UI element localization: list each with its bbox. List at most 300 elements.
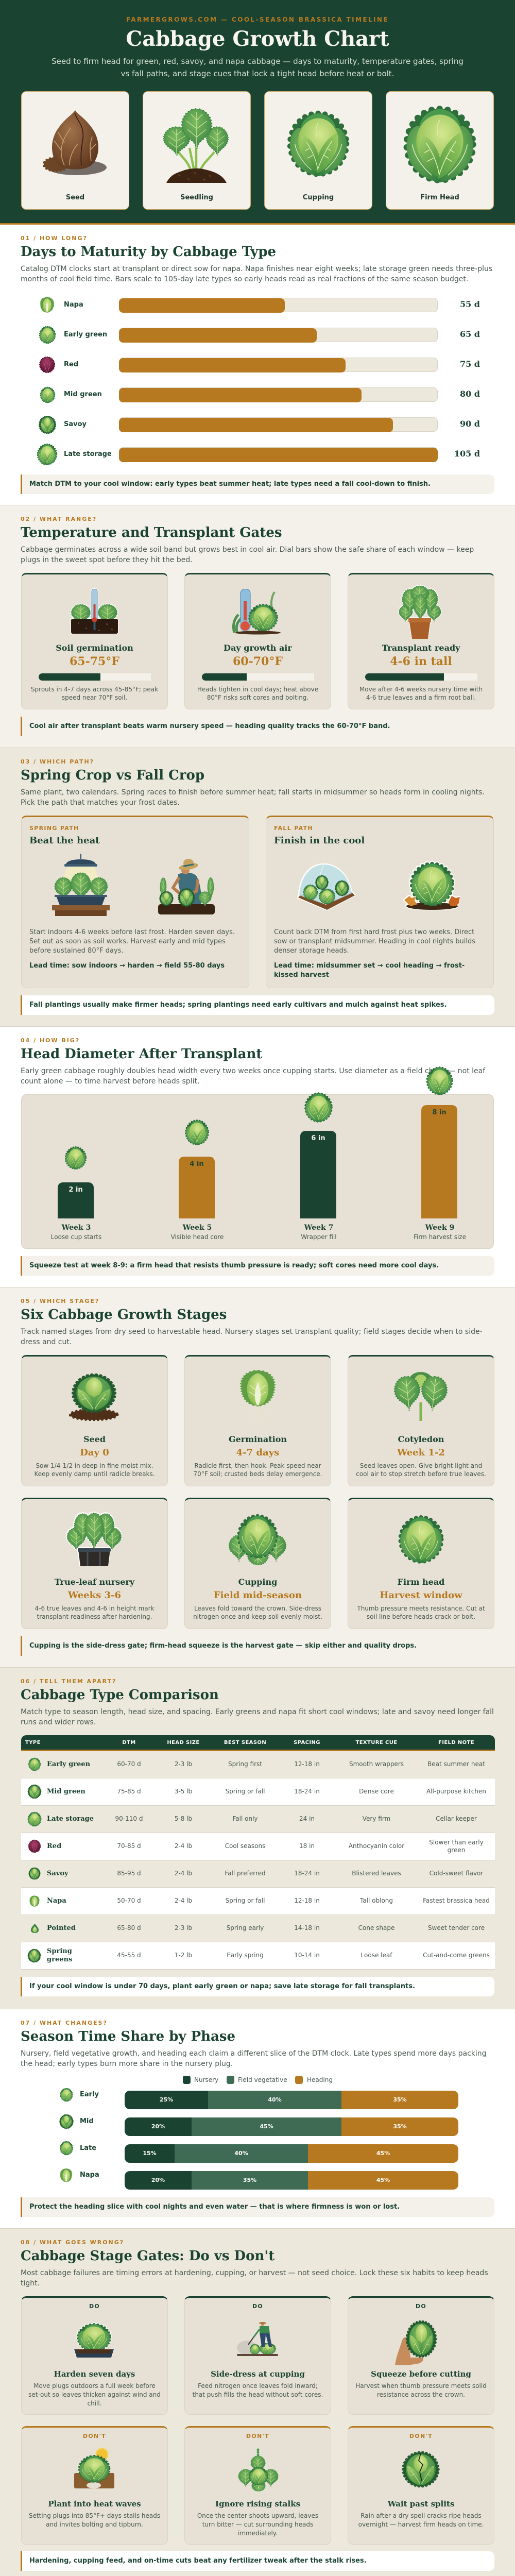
row: late storage: 24 in bbox=[299, 1815, 315, 1822]
note: Visible head core bbox=[171, 1233, 224, 1241]
card: soil germination bbox=[21, 573, 168, 709]
description: sow or transplant midsummer. Heading in cool nights builds bbox=[274, 938, 475, 945]
description: Count back DTM from first hard frost plus two weeks. Direct bbox=[274, 928, 474, 936]
lead time: Lead time: sow indoors → harden → field 55-80 days bbox=[29, 962, 225, 970]
description: denser storage heads. bbox=[274, 947, 349, 955]
note bbox=[197, 686, 318, 701]
bar bbox=[119, 387, 438, 402]
icon: firm head bbox=[393, 1514, 449, 1565]
section 5: growth stages bbox=[0, 1287, 515, 1667]
callout: If your cool window is under 70 days, plant early green or napa; save late storage for fall transplants. bbox=[29, 1982, 415, 1990]
panel: fall path bbox=[266, 816, 494, 988]
note: Harvest when thumb pressure meets solid bbox=[355, 2382, 487, 2389]
row: early green: Early green bbox=[47, 1760, 90, 1768]
section intro: tight. bbox=[21, 2279, 40, 2287]
week: Week 9 bbox=[425, 1224, 454, 1232]
card: true-leaf nursery bbox=[21, 1498, 168, 1629]
icon: seed bbox=[69, 1372, 119, 1421]
icon: late bbox=[59, 2141, 74, 2156]
row: napa bbox=[40, 297, 480, 313]
note: soil line before heads crack or bolt. bbox=[367, 1613, 475, 1620]
name: Ignore rising stalks bbox=[215, 2499, 300, 2509]
callout bbox=[21, 717, 494, 736]
section intro: dress and cut. bbox=[21, 1338, 72, 1346]
icon: cupping bbox=[228, 1513, 287, 1566]
note: nitrogen once and keep soil evenly moist. bbox=[193, 1613, 322, 1620]
legend: heading: Heading bbox=[307, 2076, 333, 2083]
week: Week 5 bbox=[183, 1224, 212, 1232]
bar chart panel: head diameter bbox=[21, 1094, 494, 1249]
row: pointed: 2-3 lb bbox=[175, 1924, 192, 1931]
row: spring greens bbox=[21, 1942, 495, 1970]
note: Thumb pressure meets resistance. Cut at bbox=[357, 1605, 485, 1612]
row: mid green: 75-85 d bbox=[117, 1788, 141, 1795]
icon: mid green bbox=[40, 386, 56, 403]
section label: 01 / HOW LONG? bbox=[21, 235, 88, 242]
section intro: Early green cabbage roughly doubles head width every two weeks once cupping starts. Use diameter as a field check — not leaf bbox=[21, 1067, 485, 1075]
stacked bar: 20% bbox=[151, 2123, 165, 2130]
tag: FALL PATH bbox=[274, 825, 313, 832]
stage card: seedling bbox=[143, 91, 251, 210]
stacked bar: 45% bbox=[376, 2177, 390, 2183]
card: cupping bbox=[184, 1498, 331, 1629]
note: Radicle first, then hook. Peak speed near bbox=[194, 1462, 321, 1469]
dial bar bbox=[39, 673, 151, 681]
row: early green: 60-70 d bbox=[117, 1760, 141, 1768]
note bbox=[348, 2381, 494, 2399]
bar bbox=[119, 417, 438, 432]
name: Day growth air bbox=[224, 643, 292, 653]
description: Set out as soon as soil works. Harvest early and mid types bbox=[29, 938, 226, 945]
stacked bar: 20% bbox=[151, 2177, 165, 2183]
row: napa: 2-4 lb bbox=[175, 1897, 192, 1904]
icon: cupping cabbage bbox=[287, 110, 349, 177]
row: pointed: 14-18 in bbox=[294, 1924, 320, 1931]
note: Move after 4-6 weeks nursery time with bbox=[359, 686, 483, 693]
stage card: firm head bbox=[386, 91, 494, 210]
note: Rain after a dry spell cracks ripe heads bbox=[360, 2512, 482, 2519]
row: red: green bbox=[448, 1846, 465, 1854]
card: day growth air bbox=[184, 573, 331, 709]
row: spring greens: 10-14 in bbox=[294, 1952, 320, 1959]
subtitle: Seed to firm head for green, red, savoy, and napa cabbage — days to maturity, temperature gates, spring bbox=[52, 57, 464, 66]
icon: cabbage in tray bbox=[73, 2323, 115, 2359]
section heading: Season Time Share by Phase bbox=[21, 2029, 235, 2044]
legend: field vegetative: Field vegetative bbox=[238, 2076, 287, 2083]
timing: Weeks 3-6 bbox=[68, 1590, 121, 1601]
name: Germination bbox=[229, 1434, 287, 1444]
section intro bbox=[21, 1707, 494, 1727]
row: savoy: 2-4 lb bbox=[175, 1870, 192, 1877]
label: Early bbox=[80, 2091, 99, 2098]
card: transplant ready bbox=[348, 573, 494, 709]
comparison table bbox=[21, 1735, 495, 1970]
label: Red bbox=[64, 361, 78, 368]
card: don't ignore stalks bbox=[184, 2426, 331, 2545]
description bbox=[29, 928, 235, 955]
row: pointed: 65-80 d bbox=[117, 1924, 141, 1931]
label: Firm Head bbox=[420, 194, 459, 201]
note: turn bitter — cut surrounding heads bbox=[202, 2520, 313, 2528]
legend: nursery bbox=[183, 2076, 214, 2084]
section label: 03 / WHICH PATH? bbox=[21, 758, 94, 765]
icon: cabbage bbox=[179, 1119, 215, 1146]
note: 4-6 true leaves and 4-6 in height mark bbox=[35, 1605, 154, 1612]
week: Week 7 bbox=[304, 1224, 333, 1232]
table header: BEST SEASON bbox=[224, 1739, 266, 1745]
section intro: Nursery, field vegetative growth, and heading each claim a different slice of the DTM clock. Late types spend more days packing bbox=[21, 2049, 487, 2058]
icon: farmer tending plants bbox=[158, 859, 215, 914]
row: savoy: Savoy bbox=[47, 1870, 68, 1877]
bar: 8 in bbox=[421, 1105, 457, 1218]
bar bbox=[119, 298, 438, 312]
row: red: 70-85 d bbox=[117, 1842, 141, 1850]
section intro: months of cool field time. Bars scale to 105-day late types so early heads read as real fractions of the same season budget. bbox=[21, 275, 468, 283]
callout: Fall plantings usually make firmer heads; spring plantings need early cultivars and mulch against heat spikes. bbox=[29, 1001, 447, 1009]
note: transplant readiness after hardening. bbox=[37, 1613, 152, 1620]
row: napa bbox=[21, 1888, 495, 1915]
card: cotyledon bbox=[348, 1355, 494, 1486]
note bbox=[359, 686, 483, 701]
section heading: Cabbage Stage Gates: Do vs Don't bbox=[21, 2248, 274, 2264]
tag: DO bbox=[252, 2303, 263, 2310]
row: spring greens: 1-2 lb bbox=[175, 1952, 192, 1959]
section intro: Cabbage germinates across a wide soil band but grows best in cool air. Dial bars show the safe share of each window — keep bbox=[21, 546, 474, 554]
icon: cabbage bbox=[65, 1146, 87, 1170]
stacked bar: 25% bbox=[160, 2096, 173, 2103]
bar: 4 in bbox=[179, 1157, 215, 1218]
icon: cabbage in heat bbox=[73, 2447, 115, 2489]
note bbox=[31, 686, 158, 701]
row: red bbox=[39, 357, 480, 373]
value: 65 d bbox=[460, 329, 480, 339]
stacked bar: 40% bbox=[268, 2096, 282, 2103]
row: savoy: Fall preferred bbox=[225, 1870, 266, 1877]
note: that push fills the head without soft cores. bbox=[193, 2391, 323, 2398]
note bbox=[348, 1462, 494, 1478]
section intro: Track named stages from dry seed to harvestable head. Nursery stages set transplant quality; field stages decide when to side- bbox=[21, 1328, 483, 1336]
callout: Protect the heading slice with cool nights and even water — that is where firmness is won or lost. bbox=[29, 2203, 400, 2211]
row: late bbox=[52, 2140, 464, 2163]
callout: Squeeze test at week 8-9: a firm head that resists thumb pressure is ready; soft cores need more cool days. bbox=[29, 1262, 439, 1269]
label: Cupping bbox=[303, 194, 334, 201]
value: 65-75°F bbox=[70, 655, 119, 668]
section label: 07 / WHAT CHANGES? bbox=[21, 2020, 108, 2026]
icon: mid bbox=[58, 2114, 75, 2129]
note: Setting plugs into 85°F+ days stalls heads bbox=[29, 2512, 160, 2519]
note: chill. bbox=[87, 2400, 102, 2407]
callout bbox=[21, 995, 494, 1015]
section label: 05 / WHICH STAGE? bbox=[21, 1298, 99, 1304]
row: red: 2-4 lb bbox=[175, 1842, 192, 1850]
name: Harden seven days bbox=[54, 2369, 135, 2379]
icon: potted transplant bbox=[398, 585, 442, 639]
timing: 4-7 days bbox=[236, 1447, 279, 1458]
stacked bar: 45% bbox=[376, 2150, 390, 2157]
name: Plant into heat waves bbox=[48, 2499, 141, 2509]
row: red bbox=[21, 1833, 495, 1860]
row: late storage bbox=[37, 443, 480, 465]
icon: farmer side-dressing bbox=[237, 2322, 278, 2356]
icon: seed bbox=[43, 110, 107, 175]
row: spring greens: greens bbox=[47, 1956, 72, 1963]
name: Side-dress at cupping bbox=[211, 2369, 305, 2379]
name: Seed bbox=[83, 1434, 106, 1444]
week 9 column bbox=[385, 1095, 494, 1248]
note: Once the center shoots upward, leaves bbox=[197, 2512, 318, 2519]
section intro: count alone — to time harvest before heads split. bbox=[21, 1077, 199, 1086]
section 6: type comparison bbox=[0, 1667, 515, 2009]
table header: HEAD SIZE bbox=[167, 1739, 200, 1745]
row: pointed: Sweet tender core bbox=[428, 1924, 485, 1931]
row: pointed: Pointed bbox=[47, 1924, 76, 1932]
section intro: Catalog DTM clocks start at transplant or direct sow for napa. Napa finishes near eight weeks; late storage green needs three-plus bbox=[21, 265, 492, 273]
row: red: Slower than early bbox=[429, 1838, 484, 1845]
lead time bbox=[274, 962, 465, 979]
note bbox=[185, 2381, 331, 2399]
bar: 2 in bbox=[58, 1182, 94, 1218]
name: Wait past splits bbox=[388, 2499, 454, 2509]
timing: Week 1-2 bbox=[397, 1447, 445, 1458]
note bbox=[22, 1462, 167, 1478]
row: red: Cool seasons bbox=[225, 1842, 265, 1850]
card: firm head bbox=[348, 1498, 494, 1629]
icon: germination bbox=[238, 1369, 278, 1425]
tag: DO bbox=[89, 2303, 100, 2310]
section heading: Spring Crop vs Fall Crop bbox=[21, 768, 204, 783]
row: late storage: Late storage bbox=[47, 1815, 94, 1823]
row: mid bbox=[52, 2113, 464, 2136]
callout bbox=[21, 1256, 494, 1276]
icon: early bbox=[59, 2088, 74, 2102]
row: napa: 12-18 in bbox=[294, 1897, 320, 1904]
name: Soil germination bbox=[56, 643, 133, 653]
section 2: temperature gates bbox=[0, 505, 515, 748]
dial bar bbox=[202, 673, 314, 681]
stacked bar bbox=[125, 2117, 458, 2136]
note: 4-6 true leaves and a firm root ball. bbox=[366, 694, 476, 701]
note: Heads tighten in cool days; heat above bbox=[197, 686, 318, 693]
icon: nursery plug bbox=[66, 1511, 123, 1566]
row: napa: 50-70 d bbox=[117, 1897, 141, 1904]
tag: DON'T bbox=[83, 2433, 106, 2439]
icon: bolting cabbage bbox=[237, 2446, 279, 2492]
callout: Hardening, cupping feed, and on-time cuts beat any fertilizer tweak after the stalk rises. bbox=[29, 2557, 367, 2565]
note: 70°F soil; crusted beds delay emergence. bbox=[194, 1470, 322, 1478]
name: Transplant ready bbox=[382, 643, 460, 653]
icon: cabbage bbox=[301, 1092, 336, 1123]
note bbox=[185, 2511, 331, 2538]
row: early green: 2-3 lb bbox=[175, 1760, 192, 1768]
icon: savoy bbox=[39, 415, 56, 434]
name: True-leaf nursery bbox=[55, 1577, 134, 1587]
name: Squeeze before cutting bbox=[371, 2369, 471, 2379]
bar: 4 in: 4 in bbox=[190, 1160, 204, 1168]
row: early green: Spring first bbox=[228, 1760, 262, 1768]
row: savoy: 85-95 d bbox=[117, 1870, 141, 1877]
legend: field vegetative bbox=[227, 2076, 294, 2084]
note: overnight — harvest firm heads on time. bbox=[358, 2520, 484, 2528]
section 1: days to maturity bbox=[0, 225, 515, 505]
stacked bar: 35% bbox=[393, 2096, 407, 2103]
section 4: head diameter bbox=[0, 1026, 515, 1287]
table header: SPACING bbox=[294, 1739, 320, 1745]
bar: 8 in: 8 in bbox=[432, 1109, 447, 1116]
label: Napa bbox=[64, 301, 83, 309]
icon: seedling bbox=[163, 108, 229, 183]
week: Week 3 bbox=[62, 1224, 91, 1232]
row: red: 18 in bbox=[299, 1842, 315, 1850]
stacked bar chart bbox=[0, 2087, 515, 2190]
icon: grow light tray bbox=[52, 854, 110, 916]
week 5 column bbox=[143, 1095, 252, 1248]
label: Mid green bbox=[64, 391, 102, 398]
callout bbox=[21, 1977, 494, 1996]
section intro: Match type to season length, head size, and spacing. Early greens and napa fit short cool windows; late and savoy need longer fall bbox=[21, 1708, 494, 1716]
path title: Finish in the cool bbox=[274, 835, 365, 846]
stacked bar: 35% bbox=[243, 2177, 256, 2183]
stage card: seed bbox=[21, 91, 129, 210]
bar: 6 in bbox=[300, 1131, 336, 1218]
row: late storage: Very firm bbox=[363, 1815, 390, 1822]
icon: napa bbox=[59, 2166, 73, 2184]
row: red: Red bbox=[47, 1842, 61, 1850]
row: red: Anthocyanin color bbox=[349, 1842, 404, 1850]
eyebrow: FARMERGROWS.COM — COOL-SEASON BRASSICA TIMELINE bbox=[126, 16, 389, 23]
row: mid green: Mid green bbox=[47, 1788, 85, 1795]
icon: early green bbox=[39, 326, 56, 344]
value: 80 d bbox=[460, 389, 480, 399]
icon: hand squeezing head bbox=[395, 2319, 439, 2365]
label: Savoy bbox=[64, 420, 87, 428]
section intro bbox=[21, 1327, 483, 1347]
description: Start indoors 4-6 weeks before last frost. Harden seven days. bbox=[29, 928, 235, 936]
row: mid green: Spring or fall bbox=[226, 1788, 265, 1795]
row: late storage bbox=[21, 1806, 495, 1833]
timing: Field mid-season bbox=[214, 1590, 302, 1601]
row: napa: Napa bbox=[47, 1897, 66, 1905]
name: Cupping bbox=[238, 1577, 277, 1587]
stacked bar bbox=[125, 2171, 458, 2190]
card: don't plant into heat bbox=[21, 2426, 168, 2545]
title: Cabbage Growth Chart bbox=[126, 27, 389, 51]
label: Seed bbox=[66, 194, 84, 201]
value: 105 d bbox=[454, 449, 480, 459]
legend: heading bbox=[295, 2076, 334, 2084]
icon: split head bbox=[400, 2450, 441, 2488]
note: Feed nitrogen once leaves fold inward; bbox=[198, 2382, 318, 2389]
row: late storage: Cellar keeper bbox=[436, 1815, 477, 1822]
timing: Day 0 bbox=[80, 1447, 109, 1458]
timing: Harvest window bbox=[380, 1590, 462, 1601]
row: napa: Fastest brassica head bbox=[423, 1897, 490, 1904]
note: Keep evenly damp until radicle breaks. bbox=[34, 1470, 155, 1478]
callout bbox=[21, 2551, 494, 2571]
icon: cotyledon bbox=[393, 1371, 449, 1421]
section heading: Temperature and Transplant Gates bbox=[21, 525, 282, 540]
week 3 column bbox=[51, 1146, 101, 1241]
row: mid green bbox=[21, 1778, 495, 1806]
bar bbox=[119, 447, 438, 462]
section intro: plugs in the sweet spot before they hit the bed. bbox=[21, 556, 193, 564]
note: 80°F risks soft cores and bolting. bbox=[207, 694, 308, 701]
value: 90 d bbox=[460, 419, 480, 429]
row: mid green: All-purpose kitchen bbox=[426, 1788, 486, 1795]
note: resistance across the crown. bbox=[377, 2391, 465, 2398]
value: 75 d bbox=[460, 359, 480, 369]
row: early green: Smooth wrappers bbox=[349, 1760, 404, 1768]
row: napa: Tall oblong bbox=[360, 1897, 393, 1904]
callout bbox=[21, 1636, 494, 1656]
description: before sustained 80°F days. bbox=[29, 947, 124, 955]
card: do harden bbox=[21, 2296, 168, 2415]
callout: Cupping is the side-dress gate; firm-head squeeze is the harvest gate — skip either and quality drops. bbox=[29, 1642, 417, 1650]
value: 4-6 in tall bbox=[390, 655, 452, 668]
name: Firm head bbox=[398, 1577, 444, 1587]
label: Late storage bbox=[64, 450, 112, 458]
section intro bbox=[21, 1067, 485, 1086]
note: and invites bolting and tipburn. bbox=[46, 2520, 143, 2528]
card: seed bbox=[21, 1355, 168, 1486]
row: savoy bbox=[39, 415, 480, 434]
row: savoy bbox=[21, 1860, 495, 1888]
row: late storage: 90-110 d bbox=[115, 1815, 143, 1822]
bar: 6 in: 6 in bbox=[311, 1134, 325, 1142]
description bbox=[274, 928, 475, 955]
stacked bar bbox=[125, 2091, 458, 2109]
row: early green: 12-18 in bbox=[294, 1760, 320, 1768]
table header: FIELD NOTE bbox=[438, 1739, 474, 1745]
table header: TEXTURE CUE bbox=[355, 1739, 398, 1745]
section intro: Most cabbage failures are timing errors at hardening, cupping, or harvest — not seed choice. Lock these six habits to keep heads bbox=[21, 2269, 488, 2277]
note: immediately. bbox=[238, 2530, 278, 2537]
section intro: Same plant, two calendars. Spring races to finish before summer heat; fall starts in midsummer so heads form in cooling nights. bbox=[21, 788, 485, 796]
stacked bar: 15% bbox=[143, 2150, 157, 2157]
bar bbox=[119, 358, 438, 372]
label: Early green bbox=[64, 331, 107, 338]
callout bbox=[21, 2197, 494, 2217]
stacked bar bbox=[125, 2144, 458, 2163]
row: pointed bbox=[21, 1915, 495, 1942]
label: Seedling bbox=[180, 194, 213, 201]
card: do squeeze bbox=[348, 2296, 494, 2415]
path title: Beat the heat bbox=[29, 835, 100, 846]
row: mid green: 18-24 in bbox=[294, 1788, 320, 1795]
note: Loose cup starts bbox=[51, 1233, 101, 1241]
note bbox=[185, 1462, 331, 1478]
label: Mid bbox=[80, 2117, 94, 2125]
section intro: runs and wider rows. bbox=[21, 1718, 96, 1726]
stacked bar: 35% bbox=[393, 2123, 407, 2130]
row: napa: Spring or fall bbox=[226, 1897, 265, 1904]
note bbox=[185, 1604, 331, 1621]
subtitle: vs fall paths, and stage cues that lock a tight head before heat or bolt. bbox=[121, 69, 394, 78]
row: pointed: Cone shape bbox=[358, 1924, 394, 1931]
row: savoy: Cold-sweet flavor bbox=[430, 1870, 483, 1877]
row: spring greens: Spring bbox=[47, 1947, 72, 1955]
lead time: Lead time: midsummer set → cool heading → frost- bbox=[274, 962, 465, 970]
row: mid green bbox=[40, 386, 480, 403]
value: 55 d bbox=[460, 299, 480, 309]
section heading: Days to Maturity by Cabbage Type bbox=[21, 244, 276, 260]
stacked bar: 45% bbox=[260, 2123, 273, 2130]
note bbox=[348, 1604, 494, 1621]
dial bar bbox=[365, 673, 477, 681]
icon: napa bbox=[40, 297, 55, 313]
lead time: kissed harvest bbox=[274, 971, 329, 979]
icon: late storage bbox=[37, 443, 58, 465]
section heading: Cabbage Type Comparison bbox=[21, 1687, 219, 1703]
